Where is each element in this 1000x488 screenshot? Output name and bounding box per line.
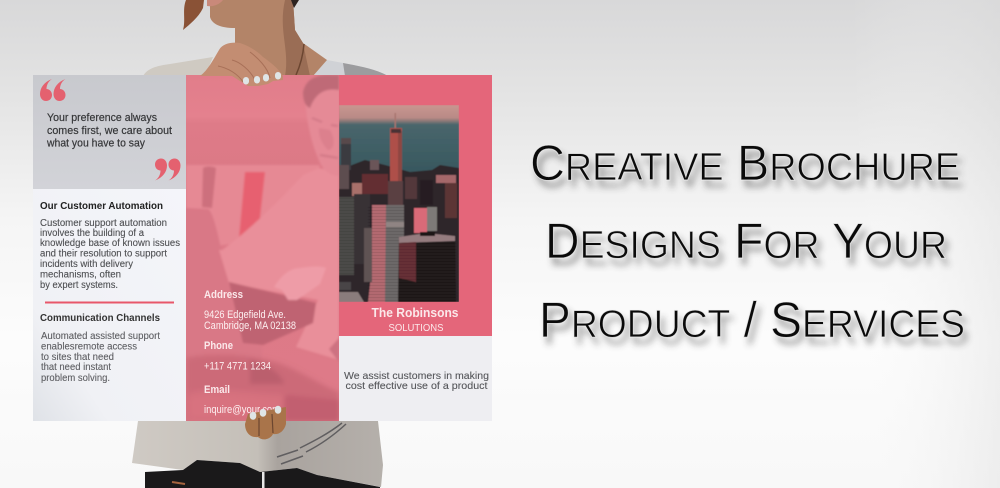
text block: automation <box>40 218 180 291</box>
sofa <box>186 165 320 250</box>
title shadow: CREATIVE BROCHURE <box>534 142 964 198</box>
text block: automation: mechanisms, often <box>40 270 121 280</box>
text block: channels <box>41 331 160 384</box>
text block: automation: by expert systems. <box>40 280 118 291</box>
address <box>204 289 296 332</box>
address: Cambridge, MA 02138 <box>204 320 296 332</box>
mid buildings <box>339 197 354 275</box>
hand <box>274 266 326 300</box>
address: 9426 Edgefield Ave. <box>204 309 286 321</box>
panel: cover footer: cost effective use of a product <box>346 380 488 392</box>
text block: automation: incidents with delivery <box>40 259 133 270</box>
text block: channels: that need instant <box>41 362 111 373</box>
title text <box>530 135 965 348</box>
woman behind the brochure <box>132 0 388 488</box>
heading: communication channels: Communication Channels <box>40 312 160 324</box>
black tower <box>398 242 456 302</box>
hand gripping brochure bottom <box>245 407 286 439</box>
lower dark area <box>186 356 339 400</box>
text block: channels: to sites that need <box>41 352 114 363</box>
text block: automation: Customer support automation <box>40 218 167 229</box>
title shadow: DESIGNS FOR YOUR <box>549 220 951 276</box>
text block: channels: Automated assisted support <box>41 331 160 342</box>
text block: automation: and their resolution to support <box>40 248 167 260</box>
quote text: Your preference always <box>47 112 157 124</box>
title text: CREATIVE BROCHURE <box>530 135 960 191</box>
panel: cover footer: We assist customers in making <box>344 370 489 382</box>
title text: DESIGNS FOR YOUR <box>545 213 947 269</box>
brochure <box>33 75 492 421</box>
heading: our customer automation: Our Customer Automation <box>40 200 163 212</box>
laptop lid and desk <box>186 208 220 250</box>
woman head <box>306 90 339 172</box>
email: inquire@your.com <box>204 404 280 416</box>
icon: opening quote mark <box>40 79 66 101</box>
woman shirt <box>219 168 339 360</box>
phone <box>204 340 271 372</box>
text block: channels: problem solving. <box>41 373 110 384</box>
contact text <box>204 289 296 416</box>
title <box>530 135 969 355</box>
quote text <box>46 112 172 150</box>
icon: closing quote mark <box>155 158 180 180</box>
text block: channels: enablesremote access <box>41 342 137 352</box>
cover title: SOLUTIONS <box>388 322 444 334</box>
text block: automation: involves the building of a <box>40 228 144 239</box>
photo: city skyline <box>339 105 459 302</box>
quote text: comes first, we care about <box>47 125 172 137</box>
phone: Phone <box>204 340 233 352</box>
quote text: what you have to say <box>46 138 145 150</box>
keyboard <box>229 282 316 345</box>
panel: contact <box>186 75 339 421</box>
panel: quote <box>33 75 186 189</box>
title shadow <box>534 142 969 355</box>
address: Address <box>204 289 243 301</box>
text block: automation: knowledge base of known issues <box>40 238 180 249</box>
cover title <box>372 305 458 334</box>
panel: cover <box>339 75 492 336</box>
panel: cover footer <box>339 336 492 421</box>
distant skyline <box>339 160 459 302</box>
title shadow: PRODUCT / SERVICES <box>543 299 969 355</box>
hand gripping brochure top <box>200 43 283 86</box>
phone: +117 4771 1234 <box>204 360 271 372</box>
cover title: The Robinsons <box>372 305 458 320</box>
title text: PRODUCT / SERVICES <box>539 292 965 348</box>
email <box>204 384 280 416</box>
panel: customer information <box>33 189 186 421</box>
email: Email <box>204 384 230 396</box>
